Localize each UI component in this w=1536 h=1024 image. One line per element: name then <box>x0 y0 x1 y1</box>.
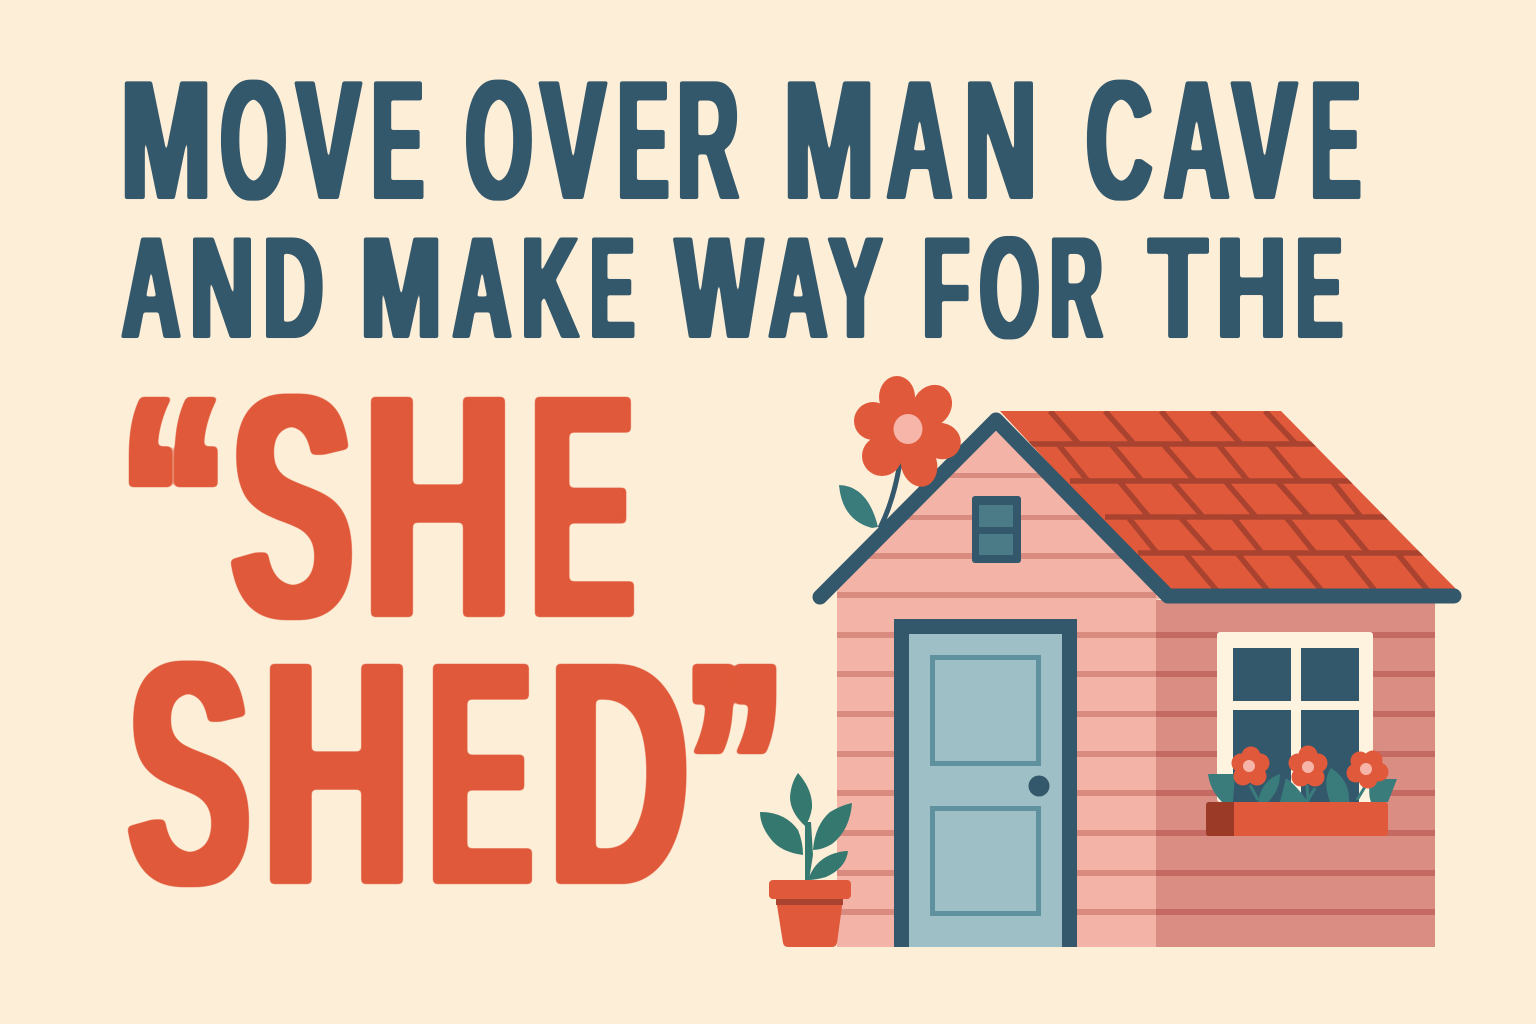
title line 1: M <box>120 45 212 236</box>
title line 2: O <box>980 206 1039 369</box>
title line 1: A <box>1164 45 1229 236</box>
headline: she shed <box>119 327 785 952</box>
title line 2 <box>122 206 1342 369</box>
title line 2: E <box>591 206 634 369</box>
window box flowers <box>1208 746 1397 802</box>
window box <box>1206 802 1388 836</box>
title line 2: A <box>769 206 827 369</box>
headline: she shed: E <box>531 327 634 685</box>
title line 1: R <box>677 45 739 236</box>
title line 1: E <box>618 45 668 236</box>
title line 1: O <box>466 45 532 236</box>
title line 1: A <box>887 45 952 236</box>
title line 1 <box>120 45 1360 236</box>
window <box>1217 632 1373 802</box>
illustration: shed <box>760 376 1459 947</box>
pot rim <box>769 880 851 899</box>
pot body <box>776 899 843 947</box>
title line 1: O <box>220 45 286 236</box>
headline: she shed: D <box>549 594 688 952</box>
text: E <box>1311 45 1360 236</box>
right side wall <box>1156 600 1435 947</box>
title line 1: E <box>372 45 424 236</box>
title line 2: M <box>360 206 442 369</box>
flower right <box>1346 750 1388 788</box>
stem <box>880 462 900 528</box>
title line 2: T <box>1149 206 1207 369</box>
headline: she shed: H <box>262 594 411 952</box>
title line 1: N <box>964 45 1037 236</box>
door <box>894 619 1077 947</box>
door knob <box>1028 776 1050 796</box>
title line 2: F <box>923 206 969 369</box>
title line 1: V <box>1232 45 1296 236</box>
title line 2: D <box>264 206 323 369</box>
title line 2: H <box>1216 206 1286 369</box>
title line 2: A <box>122 206 180 369</box>
headline: she shed: E <box>429 594 532 952</box>
flower centre <box>894 414 922 444</box>
title line 2: R <box>1050 206 1102 369</box>
door panel: upper <box>932 658 1038 764</box>
title line 2: N <box>190 206 254 369</box>
title line 1: V <box>540 45 606 236</box>
front wall with siding <box>837 420 1168 947</box>
title line 2: W <box>676 206 762 369</box>
title line 1: C <box>1086 45 1152 236</box>
roof shingles <box>1000 411 1459 592</box>
gable vent window <box>972 496 1021 563</box>
headline: she shed: S <box>231 327 353 685</box>
headline: she shed: “ <box>119 327 228 685</box>
text: E <box>1296 206 1342 369</box>
headline: she shed: H <box>363 327 513 685</box>
flower left <box>1232 746 1270 786</box>
flower middle <box>1288 746 1328 786</box>
roof fascia <box>820 420 1454 597</box>
potted plant <box>760 773 852 947</box>
title line 2: K <box>522 206 578 369</box>
title line 2: Y <box>829 206 882 369</box>
headline: she shed: S <box>128 594 250 952</box>
headline: she shed: ” <box>683 594 786 952</box>
door panel: lower <box>932 808 1038 914</box>
flower head <box>854 376 966 491</box>
title line 2: A <box>453 206 511 369</box>
plant leaves <box>760 773 852 880</box>
title line 1: M <box>784 45 875 236</box>
climbing flower <box>839 376 966 528</box>
title line 1: V <box>296 45 360 236</box>
leaf <box>839 485 878 528</box>
